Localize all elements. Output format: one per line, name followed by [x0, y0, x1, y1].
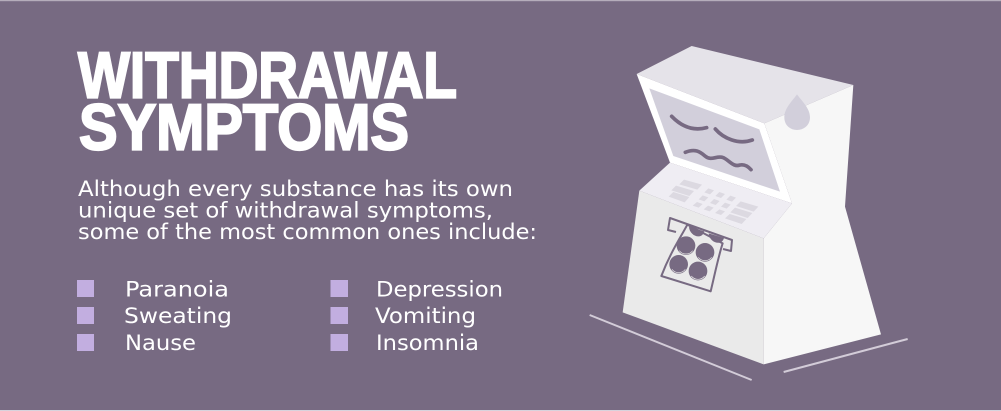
- symptom list: right column: Insomnia: [376, 331, 479, 356]
- console top: [639, 163, 792, 238]
- symptom list: left column: Sweating: [124, 304, 232, 329]
- symptom list: left column: Paranoia: [125, 278, 229, 302]
- symptom list: left column: [77, 278, 232, 356]
- intro text: unique set of withdrawal symptoms,: [78, 198, 493, 224]
- machine front: [623, 191, 764, 364]
- title: WITHDRAWAL: [78, 38, 457, 112]
- coin highlights: [672, 251, 712, 279]
- machine right side: [764, 85, 881, 364]
- symptom list: right column: [330, 278, 503, 356]
- symptom list: left column: Nause: [125, 331, 196, 356]
- intro text: [78, 177, 537, 245]
- screen: [649, 88, 780, 192]
- illustration: sad slot machine: [590, 46, 908, 380]
- title: SYMPTOMS: [79, 90, 409, 164]
- intro text: some of the most common ones include:: [78, 220, 537, 245]
- receipt with coins: [661, 218, 732, 291]
- floor lines: [590, 315, 908, 380]
- intro text: Although every substance has its own: [78, 177, 513, 202]
- console buttons: [669, 180, 758, 224]
- sweat drop: [784, 94, 810, 130]
- machine top: [637, 46, 853, 123]
- symptom list: right column: Depression: [376, 278, 503, 302]
- title: [78, 38, 457, 164]
- sad face: [672, 116, 752, 170]
- symptom list: right column: Vomiting: [375, 304, 476, 329]
- screen bezel: [637, 74, 792, 203]
